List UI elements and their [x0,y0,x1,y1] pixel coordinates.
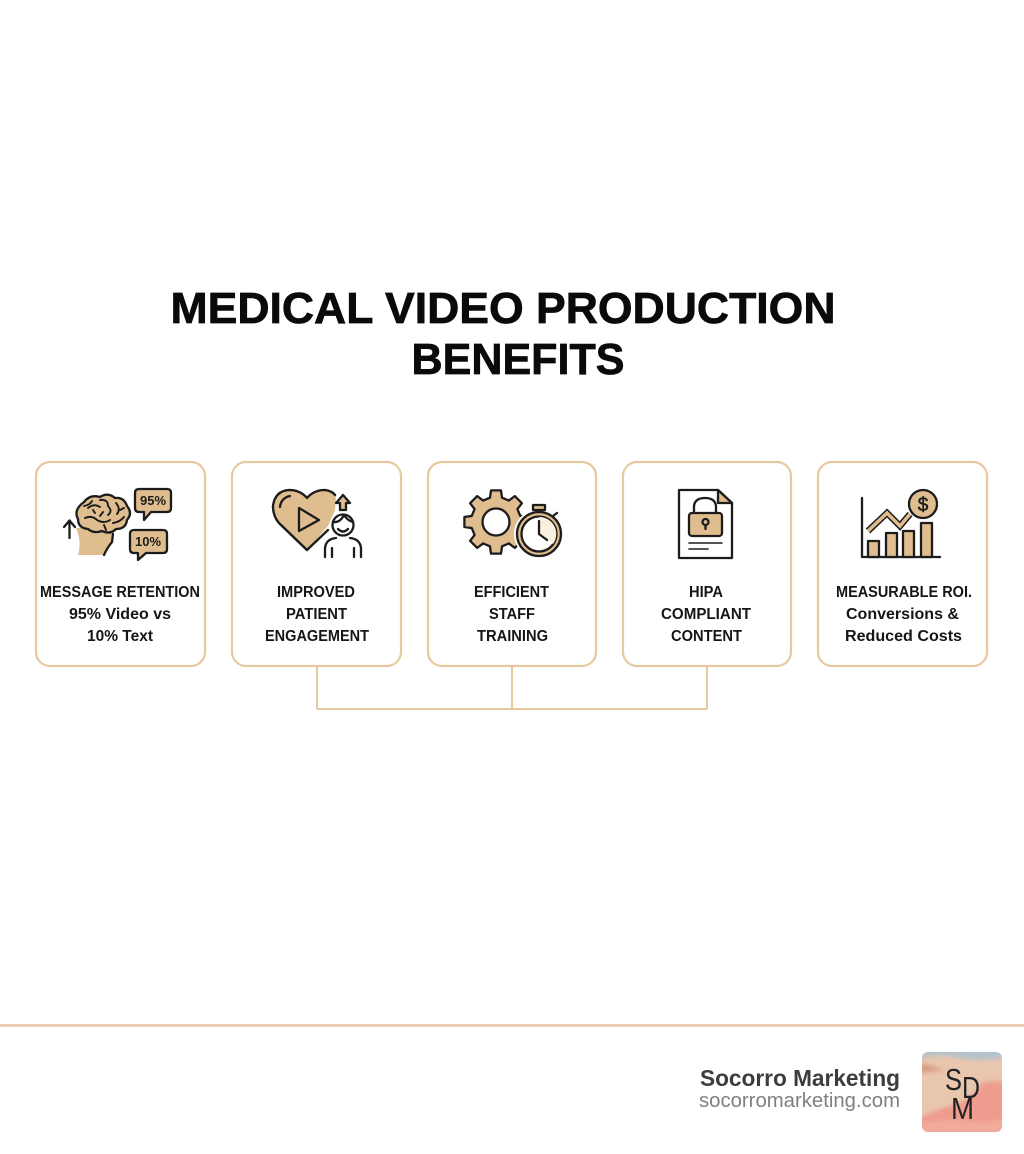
label: message retention: 10% Text [87,628,153,645]
label: efficient staff training: STAFF [489,606,535,623]
label: message retention [40,584,200,645]
label: efficient staff training: TRAINING [477,628,548,645]
title: MEDICAL VIDEO PRODUCTION [170,284,836,333]
logo: SDM watercolor tile: S [945,1062,962,1097]
label: efficient staff training [474,584,549,645]
speech bubble: 95%: 95% [140,493,166,508]
label: improved patient engagement: IMPROVED [277,584,355,601]
footer brand text: Socorro Marketing [700,1065,900,1091]
label: HIPAA compliant content: HIPA [689,584,723,601]
icon: brain with speech bubbles [64,489,171,560]
label: measurable ROI: Conversions & [846,606,959,623]
panel: measurable ROI [818,462,987,666]
label: improved patient engagement: ENGAGEMENT [265,628,369,645]
label: HIPAA compliant content: CONTENT [671,628,742,645]
label: measurable ROI: Reduced Costs [845,628,962,645]
panel: improved patient engagement [232,462,401,666]
connector lines between cards [317,666,707,709]
icon: heart with play button and patient [273,490,361,557]
label: measurable ROI: MEASURABLE ROI. [836,584,972,601]
label: efficient staff training: EFFICIENT [474,584,549,601]
logo: SDM watercolor tile: D [962,1070,980,1105]
label: message retention: MESSAGE RETENTION [40,584,200,601]
label: improved patient engagement [265,584,369,645]
footer brand text: socorromarketing.com [699,1090,900,1112]
footer divider [0,1024,1024,1027]
icon: bar chart with trend line and dollar coin: $ [918,495,929,516]
panel: HIPAA compliant content [623,462,791,666]
label: HIPAA compliant content: COMPLIANT [661,606,751,623]
label: HIPAA compliant content [661,584,751,645]
panel: message retention [36,462,205,666]
title: BENEFITS [412,335,624,384]
logo: SDM watercolor tile [922,1052,1002,1132]
icon: gear and stopwatch [464,490,564,559]
label: message retention: 95% Video vs [69,606,171,623]
speech bubble: 10%: 10% [135,534,161,549]
label: improved patient engagement: PATIENT [286,606,347,623]
panel: efficient staff training [428,462,596,666]
icon: document with padlock [679,490,732,558]
title [170,284,836,384]
logo: SDM watercolor tile: M [951,1091,974,1126]
footer brand text [699,1065,900,1112]
label: measurable ROI [836,584,972,645]
icon: bar chart with trend line and dollar coin [862,490,940,557]
